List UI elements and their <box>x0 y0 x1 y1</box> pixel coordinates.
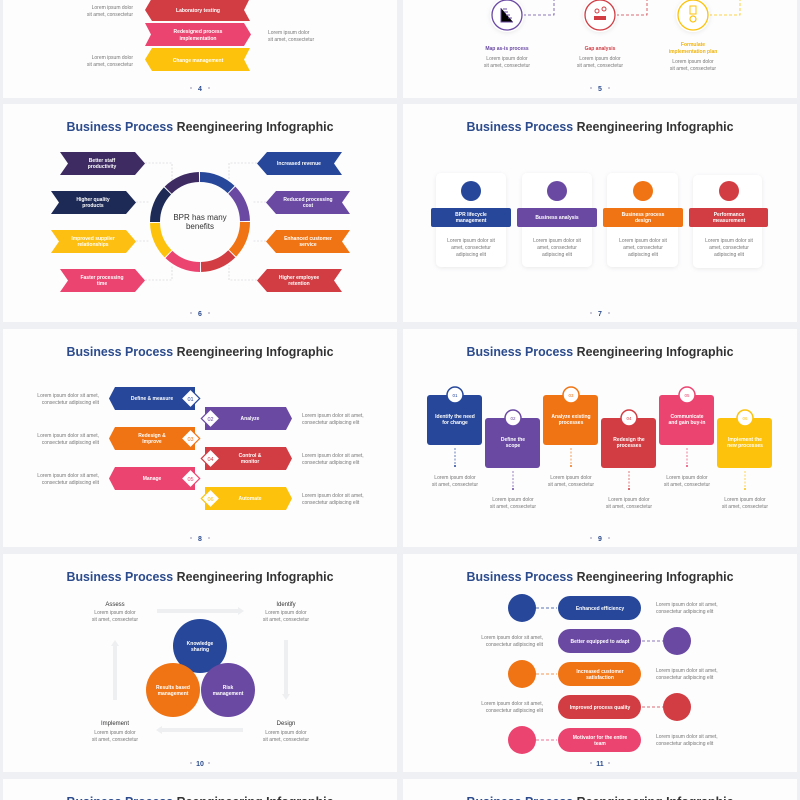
text: lorem left 1 <box>87 5 133 18</box>
row: Improved process quality: Lorem ipsum dolor sit amet, <box>481 701 543 707</box>
step 04 Control & monitor <box>201 447 292 470</box>
row: Improved process quality: consectetur adipiscing elit <box>486 708 544 714</box>
row: Increased customer satisfaction: consectetur adipiscing elit <box>656 675 714 681</box>
box 01: for change <box>442 420 468 426</box>
banner: Increased revenue <box>257 152 342 175</box>
box 04: Redesign the <box>613 437 645 443</box>
donut center text <box>173 213 227 231</box>
chevron: Change management: Change management <box>173 58 224 64</box>
page number 4 <box>190 86 210 93</box>
step 04 Control & monitor: Control & <box>239 453 262 459</box>
venn circles: Knowledge <box>187 641 214 647</box>
box 06: Lorem ipsum dolor <box>724 497 766 503</box>
banner: Higher quality products: Higher quality <box>76 197 110 203</box>
lorem texts: consectetur adipiscing elit <box>302 500 360 506</box>
banner: Increased revenue: Increased revenue <box>277 161 321 167</box>
row: Motivator for the entire team: Motivator for the entire <box>573 735 627 741</box>
slide 8: six steps <box>37 345 364 543</box>
lorem texts: consectetur adipiscing elit <box>42 400 100 406</box>
box 03: 03 <box>568 393 574 398</box>
box 04: Lorem ipsum dolor <box>608 497 650 503</box>
card: Performance measurement: Lorem ipsum dolor sit <box>705 238 754 244</box>
icon: gap analysis <box>583 0 617 32</box>
row: Increased customer satisfaction: Lorem ipsum dolor sit amet, <box>656 668 718 674</box>
banner: Reduced processing cost: cost <box>303 203 313 209</box>
card: Business process design: Business process <box>622 212 665 218</box>
row: Improved process quality: Improved process quality <box>570 705 631 711</box>
row: Enhanced efficiency: Lorem ipsum dolor sit amet, <box>656 602 718 608</box>
banner: Higher quality products <box>51 191 136 214</box>
box 05 <box>659 387 714 488</box>
lorem texts: Lorem ipsum dolor sit amet, <box>37 473 99 479</box>
banner: Faster processing time: time <box>97 281 107 287</box>
label: Assess: Lorem ipsum dolor <box>94 610 136 616</box>
page number 10 <box>190 761 210 768</box>
step 05 Manage <box>109 467 200 490</box>
venn circles: management <box>158 691 189 697</box>
box 02: scope <box>506 443 520 449</box>
card: Performance measurement: Performance <box>714 212 744 218</box>
page number 6 <box>190 311 210 318</box>
banner: Improved supplier relationships <box>51 230 136 253</box>
chevron: Redesigned process implementation <box>145 23 251 46</box>
row: Improved process quality <box>481 693 691 721</box>
card: BPR lifecycle management: amet, consectetur <box>451 245 491 251</box>
box 06: Implement the <box>728 437 762 443</box>
row: Increased customer satisfaction: satisfaction <box>586 675 614 681</box>
row: Increased customer satisfaction <box>508 660 718 688</box>
label: Assess: sit amet, consectetur <box>92 617 138 623</box>
card: Business analysis <box>517 173 597 267</box>
box 03: Analyze existing <box>551 414 591 420</box>
label: Map as-is process <box>484 46 530 69</box>
banner: Enhanced customer service: Enhanced customer <box>284 236 332 242</box>
venn circles: sharing <box>191 647 209 653</box>
step 06 Automate: 06 <box>207 497 214 503</box>
cycle arrows <box>111 607 290 734</box>
box 04 <box>601 410 656 510</box>
label: Gap analysis <box>577 46 623 69</box>
page number 11: 11 <box>596 761 604 768</box>
text: lorem right: sit amet, consectetur <box>268 37 314 43</box>
card: Business analysis: Lorem ipsum dolor sit <box>533 238 582 244</box>
card: Performance measurement: adipiscing elit <box>714 252 745 258</box>
title: Business Process Reengineering Infographic <box>66 570 334 584</box>
page number 9: 9 <box>598 536 602 543</box>
chevron: Redesigned process implementation: implementation <box>180 36 216 42</box>
box 02: Lorem ipsum dolor <box>492 497 534 503</box>
box 06: new processes <box>727 443 763 449</box>
page number 7: 7 <box>598 311 602 318</box>
banner: Better staff productivity: productivity <box>88 164 117 170</box>
text: lorem left 2: Lorem ipsum dolor <box>92 55 133 61</box>
step 02 Analyze: Analyze <box>241 416 260 422</box>
banner: Higher employee retention: retention <box>288 281 310 287</box>
box 01: 01 <box>452 393 458 398</box>
label: Gap analysis: Lorem ipsum dolor <box>579 56 621 62</box>
step 03 Redesign & Improve: Improve <box>142 439 162 445</box>
card: Business analysis: amet, consectetur <box>537 245 577 251</box>
lorem texts: consectetur adipiscing elit <box>42 480 100 486</box>
step 05 Manage: 05 <box>187 477 194 483</box>
step 06 Automate: Automate <box>238 496 262 502</box>
step 06 Automate <box>201 487 292 510</box>
step 04 Control & monitor: 04 <box>207 457 214 463</box>
banner: Improved supplier relationships: Improved supplier <box>71 236 115 242</box>
box 03: processes <box>559 420 584 426</box>
card: Business process design: adipiscing elit <box>628 252 659 258</box>
page number 4: 4 <box>198 86 202 93</box>
venn circles: Risk <box>223 685 233 691</box>
donut center text: BPR has many <box>173 213 227 222</box>
box 01 <box>427 387 482 488</box>
lorem texts: Lorem ipsum dolor sit amet, <box>302 493 364 499</box>
lorem texts: Lorem ipsum dolor sit amet, <box>37 433 99 439</box>
row: Motivator for the entire team: consectetur adipiscing elit <box>656 741 714 747</box>
label: Design: Design <box>277 721 295 727</box>
page number 7 <box>590 311 610 318</box>
row: Motivator for the entire team: team <box>594 741 606 747</box>
box 03: sit amet, consectetur <box>548 482 594 488</box>
card: Performance measurement: measurement <box>713 218 746 224</box>
row: Motivator for the entire team <box>508 726 718 754</box>
step 03 Redesign & Improve: Redesign & <box>138 433 166 439</box>
box 05: and gain buy-in <box>669 420 705 426</box>
text: lorem left 2: sit amet, consectetur <box>87 62 133 68</box>
box 05: Lorem ipsum dolor <box>666 475 708 481</box>
banner: Reduced processing cost <box>266 191 350 214</box>
label: Gap analysis: sit amet, consectetur <box>577 63 623 69</box>
label: Design: sit amet, consectetur <box>263 737 309 743</box>
page number 9 <box>590 536 610 543</box>
label: Formulate implementation plan <box>669 42 717 72</box>
icon: map as-is <box>490 0 524 32</box>
card: Business analysis: adipiscing elit <box>542 252 573 258</box>
box 05: Communicate <box>670 414 704 420</box>
banner: Higher employee retention: Higher employee <box>279 275 319 281</box>
text: lorem left 1: Lorem ipsum dolor <box>92 5 133 11</box>
step 05 Manage: Manage <box>143 476 162 482</box>
step 01 Define & measure <box>109 387 200 410</box>
label: Implement: Lorem ipsum dolor <box>94 730 136 736</box>
step 03 Redesign & Improve <box>109 427 200 450</box>
banner: Higher quality products: products <box>82 203 104 209</box>
slide 6: BPR benefits donut <box>51 120 350 318</box>
label: Assess <box>92 602 138 623</box>
card: BPR lifecycle management: adipiscing elit <box>456 252 487 258</box>
card: Performance measurement: amet, consectetur <box>709 245 749 251</box>
title: Business Process Reengineering Infographic <box>466 120 734 134</box>
card: Business process design <box>603 173 683 267</box>
label: Identify: sit amet, consectetur <box>263 617 309 623</box>
card: BPR lifecycle management: BPR lifecycle <box>455 212 487 218</box>
title: Business Process Reengineering Infographic <box>466 345 734 359</box>
chevron: Laboratory testing: Laboratory testing <box>176 8 220 14</box>
row: Better equipped to adapt: Better equipped to adapt <box>571 639 630 645</box>
card: Business process design: Lorem ipsum dolor sit <box>619 238 668 244</box>
label: Implement: Implement <box>101 721 129 727</box>
label: Implement <box>92 721 138 743</box>
title: Business Process Reengineering Infographic <box>66 120 334 134</box>
chevron: Redesigned process implementation: Redesigned process <box>174 29 223 35</box>
box 05: 05 <box>684 393 690 398</box>
step 01 Define & measure: Define & measure <box>131 396 173 402</box>
slide 5: process circles <box>484 0 740 93</box>
chevron: Laboratory testing <box>145 0 250 21</box>
chevron: Change management <box>145 48 250 71</box>
box 01: Lorem ipsum dolor <box>434 475 476 481</box>
text: lorem left 2 <box>87 55 133 68</box>
page number 11 <box>590 761 610 768</box>
venn circles <box>146 619 255 717</box>
label: Map as-is process: sit amet, consectetur <box>484 63 530 69</box>
card: Business process design: design <box>635 218 651 224</box>
partial titles bottom <box>66 795 734 800</box>
label: Formulate implementation plan: sit amet, consectetur <box>670 66 716 72</box>
label: Gap analysis: Gap analysis <box>585 46 616 52</box>
row: Better equipped to adapt: consectetur adipiscing elit <box>486 642 544 648</box>
banner: Faster processing time <box>60 269 145 292</box>
text: lorem right: Lorem ipsum dolor <box>268 30 310 36</box>
box 02: 02 <box>510 416 516 421</box>
label: Identify: Lorem ipsum dolor <box>265 610 307 616</box>
donut center text: benefits <box>186 222 214 231</box>
box 02: sit amet, consectetur <box>490 504 536 510</box>
label: Map as-is process: Map as-is process <box>485 46 529 52</box>
banner: Better staff productivity: Better staff <box>89 158 116 164</box>
label: Formulate implementation plan: Lorem ipsum dolor <box>672 59 714 65</box>
label: Assess: Assess <box>105 602 125 608</box>
label: Design <box>263 721 309 743</box>
icon: formulate plan <box>676 0 710 32</box>
title: Business Process Reengineering Infographic <box>66 345 334 359</box>
slide 9: six stepped boxes <box>427 345 772 543</box>
title: Business Process Reengineering Infographic <box>466 570 734 584</box>
row: Increased customer satisfaction: Increased customer <box>576 669 624 675</box>
card: Business process design: amet, consectetur <box>623 245 663 251</box>
box 04: sit amet, consectetur <box>606 504 652 510</box>
row: Enhanced efficiency <box>508 594 718 622</box>
banner: Faster processing time: Faster processing <box>80 275 124 281</box>
label: Identify <box>263 602 309 623</box>
step 02 Analyze <box>201 407 292 430</box>
label: Map as-is process: Lorem ipsum dolor <box>486 56 528 62</box>
page number 5 <box>590 86 610 93</box>
box 01: sit amet, consectetur <box>432 482 478 488</box>
lorem texts: consectetur adipiscing elit <box>302 460 360 466</box>
lorem texts: Lorem ipsum dolor sit amet, <box>302 413 364 419</box>
lorem texts <box>37 393 364 506</box>
label: Identify: Identify <box>276 602 296 608</box>
venn circles: management <box>213 691 244 697</box>
slide 11: pill list <box>466 570 734 768</box>
page number 5: 5 <box>598 86 602 93</box>
row: Enhanced efficiency: Enhanced efficiency <box>576 606 624 612</box>
lorem texts: consectetur adipiscing elit <box>42 440 100 446</box>
box 03 <box>543 387 598 488</box>
row: Better equipped to adapt: Lorem ipsum dolor sit amet, <box>481 635 543 641</box>
step 03 Redesign & Improve: 03 <box>187 437 194 443</box>
box 02 <box>485 410 540 510</box>
card: Business analysis: Business analysis <box>535 215 579 221</box>
card: BPR lifecycle management: Lorem ipsum dolor sit <box>447 238 496 244</box>
box 01: Identify the need <box>435 414 475 420</box>
row: Enhanced efficiency: consectetur adipiscing elit <box>656 609 714 615</box>
box 03: Lorem ipsum dolor <box>550 475 592 481</box>
label: Implement: sit amet, consectetur <box>92 737 138 743</box>
donut chart <box>136 158 264 286</box>
page number 10: 10 <box>196 761 204 768</box>
card: BPR lifecycle management <box>431 173 511 267</box>
step 01 Define & measure: 01 <box>187 397 194 403</box>
box 04: 04 <box>626 416 632 421</box>
text: lorem right <box>268 30 314 43</box>
slide 7: four cards <box>431 120 768 318</box>
page number 6: 6 <box>198 311 202 318</box>
banner: Enhanced customer service <box>266 230 350 253</box>
box 06: sit amet, consectetur <box>722 504 768 510</box>
venn circles: Results based <box>156 685 190 691</box>
box 02: Define the <box>501 437 525 443</box>
lorem texts: Lorem ipsum dolor sit amet, <box>302 453 364 459</box>
slide 4: chevron list <box>87 0 314 93</box>
page number 8 <box>190 536 210 543</box>
banner: Improved supplier relationships: relationships <box>77 242 109 248</box>
lorem texts: Lorem ipsum dolor sit amet, <box>37 393 99 399</box>
row: Better equipped to adapt <box>481 627 691 655</box>
box 06 <box>717 410 772 510</box>
text: lorem left 1: sit amet, consectetur <box>87 12 133 18</box>
label: Formulate implementation plan: Formulate <box>681 42 705 48</box>
banner: Enhanced customer service: service <box>299 242 317 248</box>
box 05: sit amet, consectetur <box>664 482 710 488</box>
banner: Better staff productivity <box>60 152 145 175</box>
lorem texts: consectetur adipiscing elit <box>302 420 360 426</box>
step 04 Control & monitor: monitor <box>241 459 259 465</box>
step 02 Analyze: 02 <box>207 417 214 423</box>
slide 10: cycle with venn <box>66 570 334 768</box>
row: Motivator for the entire team: Lorem ipsum dolor sit amet, <box>656 734 718 740</box>
box 04: processes <box>617 443 642 449</box>
banner: Reduced processing cost: Reduced processing <box>283 197 333 203</box>
page number 8: 8 <box>198 536 202 543</box>
box 06: 06 <box>742 416 748 421</box>
banner: Higher employee retention <box>257 269 342 292</box>
label: Design: Lorem ipsum dolor <box>265 730 307 736</box>
card: BPR lifecycle management: management <box>456 218 487 224</box>
card: Performance measurement <box>689 175 768 268</box>
label: Formulate implementation plan: implementation plan <box>669 49 717 55</box>
